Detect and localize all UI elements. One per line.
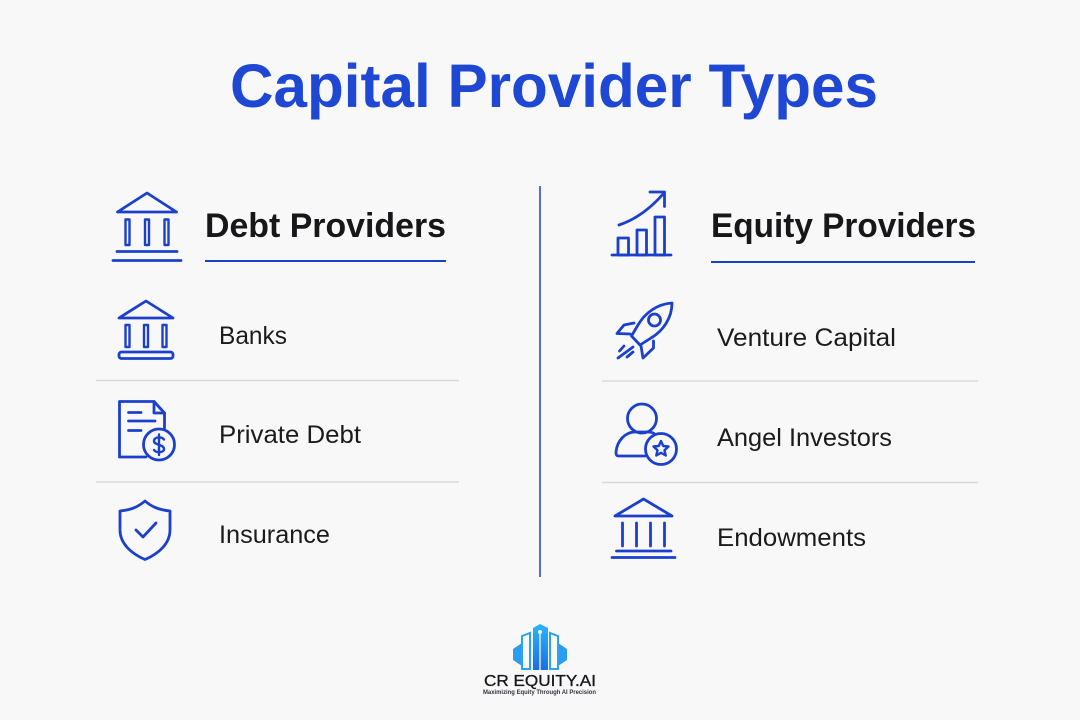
- wordmark: CR EQUITY.AI: [484, 673, 596, 690]
- label: endowments: Endowments: [717, 524, 866, 552]
- title: Capital Provider Types: [230, 52, 878, 120]
- row: private debt: [120, 402, 361, 460]
- label: venture capital: Venture Capital: [717, 324, 896, 352]
- label: insurance: Insurance: [219, 521, 330, 549]
- row: insurance: [120, 501, 330, 560]
- panel: equity providers: [602, 192, 978, 558]
- icon: person with star: [616, 404, 676, 464]
- icon: bank: [119, 301, 173, 358]
- icon: endowment building: [612, 499, 675, 558]
- icon: rocket: [617, 303, 672, 358]
- row: angel investors: [616, 404, 892, 464]
- heading: debt providers: Debt Providers: [205, 207, 446, 245]
- icon: logo skyline: [513, 624, 567, 670]
- heading: equity providers: Equity Providers: [711, 207, 976, 245]
- icon: growth chart: [612, 192, 671, 255]
- tagline: Maximizing Equity Through AI Precision: [483, 690, 596, 696]
- logo: CR Equity.AI: [483, 624, 596, 696]
- row: banks: [119, 301, 287, 358]
- row: endowments: [612, 499, 866, 558]
- icon: shield with check: [120, 501, 170, 560]
- label: banks: Banks: [219, 322, 287, 350]
- label: angel investors: Angel Investors: [717, 424, 892, 452]
- label: private debt: Private Debt: [219, 421, 361, 449]
- row: venture capital: [617, 303, 896, 358]
- panel: debt providers: [96, 193, 459, 560]
- icon: document with dollar: [120, 402, 174, 460]
- icon: debt header bank: [113, 193, 181, 260]
